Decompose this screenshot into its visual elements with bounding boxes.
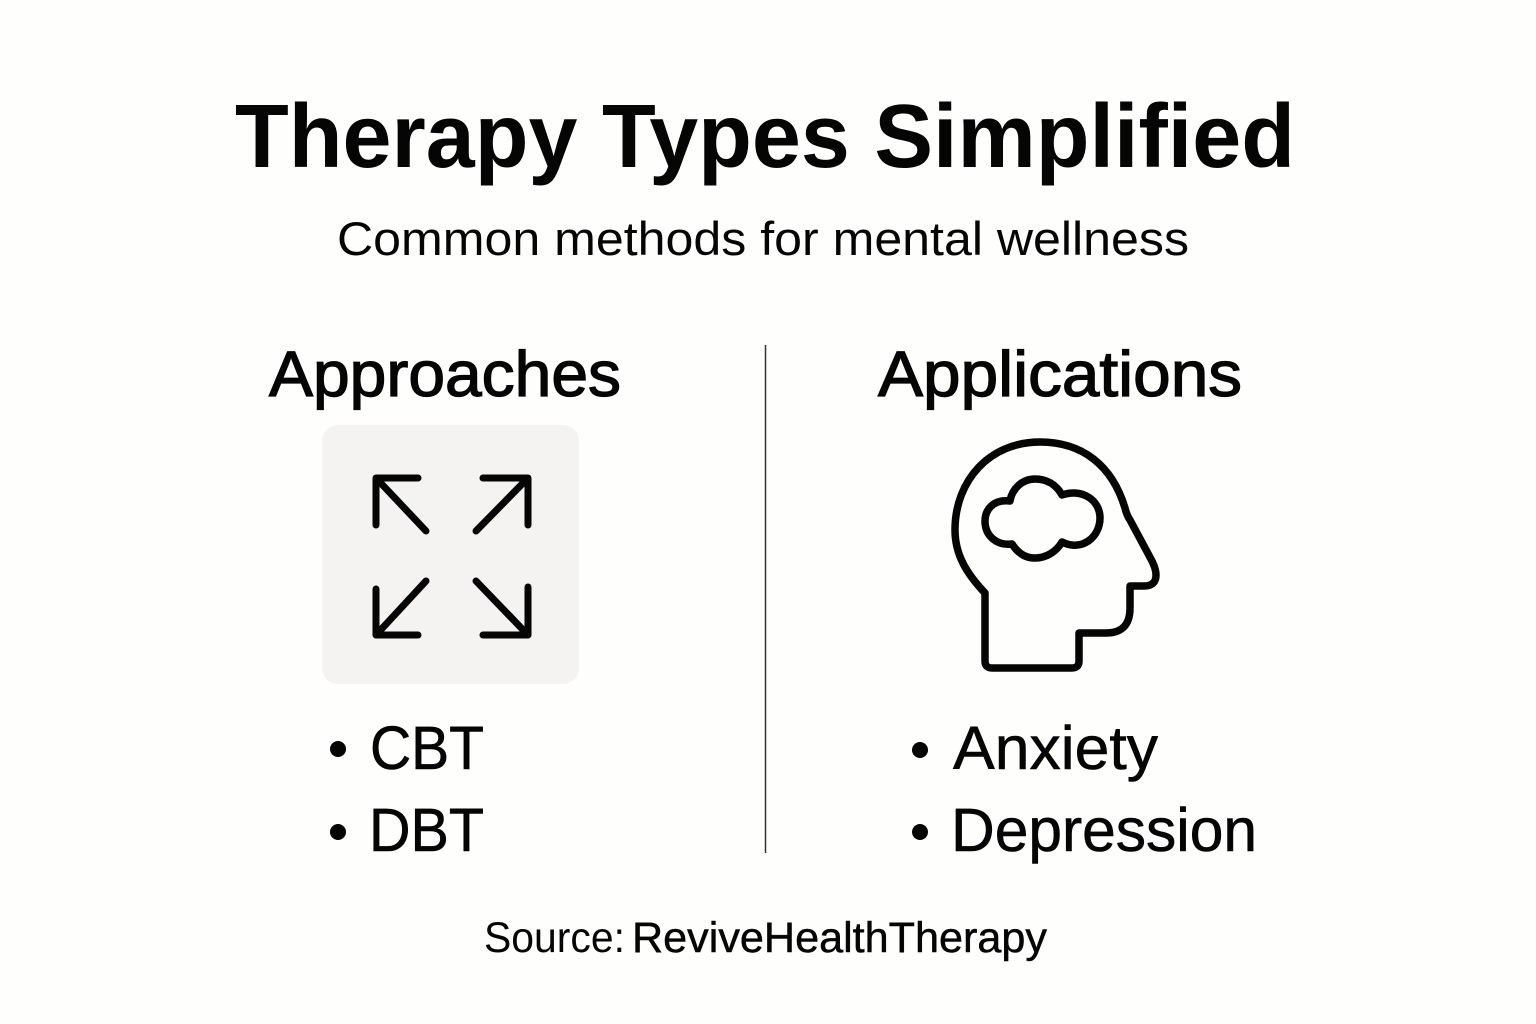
source: Source: [484,914,625,962]
list: approaches: DBT [369,796,484,864]
list: applications: Depression [951,796,1257,864]
title: Therapy Types Simplified [235,87,1295,187]
list: approaches: CBT [370,714,484,782]
source: ReviveHealthTherapy [632,914,1047,962]
icon: head with cloud [955,442,1156,668]
icon: four outward arrows [322,425,579,684]
heading: approaches: Approaches [269,338,621,410]
panel: applications [878,338,1257,864]
list: approaches [330,714,484,864]
panel: approaches [269,338,621,864]
list: applications [912,714,1257,864]
heading: applications: Applications [878,338,1242,410]
list: applications: Anxiety [953,714,1159,782]
subtitle: Common methods for mental wellness [337,212,1189,265]
